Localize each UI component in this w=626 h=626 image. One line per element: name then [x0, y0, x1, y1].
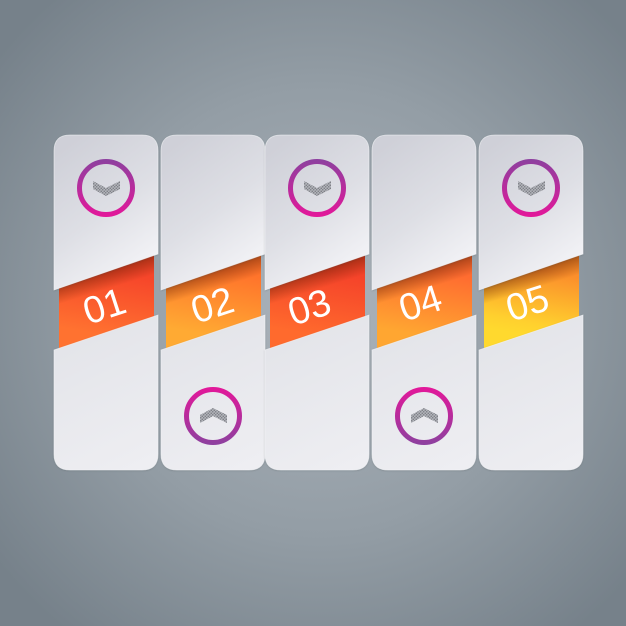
number 05: 05: [501, 277, 554, 330]
panel: step 04: [372, 135, 476, 470]
ribbon 05: [484, 255, 579, 351]
ribbon 03: [270, 255, 365, 351]
icon: up chevron in ring: [398, 390, 450, 442]
upper card 03: [265, 135, 369, 290]
upper card 01: [54, 135, 158, 290]
lower card 03: [265, 315, 369, 470]
number 02: 02: [186, 279, 239, 332]
panel: step 02: [161, 135, 265, 470]
lower card 04: [372, 315, 476, 470]
upper card 02: [161, 135, 265, 290]
ribbon 01: [59, 255, 154, 351]
lower card 01: [54, 315, 158, 470]
ribbon 02: [166, 255, 261, 351]
number 03: 03: [283, 281, 336, 334]
number 04: 04: [394, 277, 447, 330]
icon: down chevron in ring: [290, 162, 344, 214]
panel: step 01: [54, 135, 158, 470]
icon: up chevron in ring: [186, 390, 240, 442]
panel: step 05: [479, 135, 583, 470]
lower card 05: [479, 315, 583, 470]
panel: step 03: [265, 135, 369, 470]
icon: down chevron in ring: [504, 162, 558, 214]
number 01: 01: [78, 280, 131, 333]
upper card 05: [479, 135, 583, 290]
icon: down chevron in ring: [80, 162, 132, 214]
upper card 04: [372, 135, 476, 290]
lower card 02: [161, 315, 265, 470]
ribbon 04: [377, 255, 472, 351]
